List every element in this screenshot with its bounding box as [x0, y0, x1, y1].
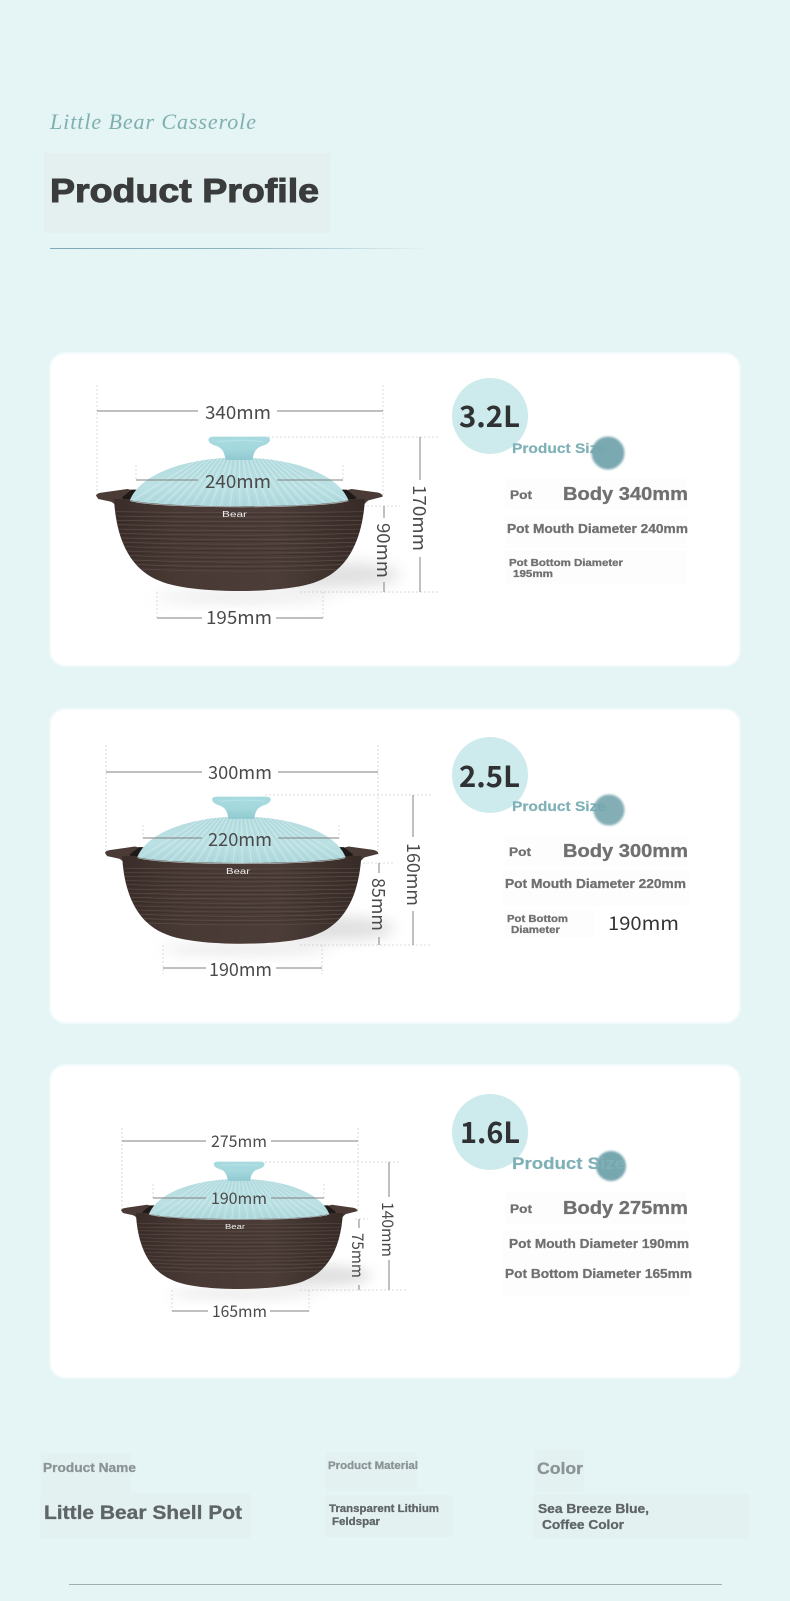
size specs 2.5L: Pot: [509, 845, 531, 859]
capacity badge 3.2L: 3.2L: [459, 394, 520, 436]
size specs 2.5L: Pot Bottom: [507, 914, 568, 925]
panel: 1.6L size card: [50, 1065, 740, 1378]
product material block: Feldspar: [332, 1516, 381, 1528]
product material block: Product Material: [328, 1460, 418, 1472]
product name block: [40, 1453, 250, 1539]
diagram: 3.2L pot dimensions: 240mm: [205, 468, 271, 494]
panel: 2.5L size card: [50, 709, 740, 1023]
color block: [534, 1450, 749, 1539]
size specs 1.6L: Body 275mm: [563, 1198, 688, 1218]
diagram: 3.2L pot dimensions: 195mm: [206, 604, 272, 630]
diagram: 3.2L pot dimensions: 170mm: [407, 485, 433, 551]
color block: Sea Breeze Blue,: [538, 1501, 649, 1516]
diagram: 2.5L pot dimensions: Bear: [226, 867, 250, 876]
size specs 2.5L: Body 300mm: [563, 841, 688, 861]
diagram: 1.6L pot dimensions: 75mm: [347, 1233, 371, 1278]
color block: Color: [537, 1459, 583, 1478]
diagram: 3.2L pot dimensions: [96, 385, 440, 630]
color block: Coffee Color: [542, 1517, 624, 1532]
diagram: 2.5L pot dimensions: [105, 745, 432, 982]
size specs 3.2L: Pot Mouth Diameter 240mm: [507, 521, 688, 536]
product material block: Transparent Lithium: [329, 1503, 439, 1515]
diagram: 2.5L pot dimensions: 190mm: [209, 956, 272, 982]
size specs 1.6L: [503, 1192, 692, 1296]
diagram: 1.6L pot dimensions: 190mm: [211, 1185, 267, 1209]
size specs 3.2L: Pot: [510, 488, 532, 502]
size specs 2.5L: Pot Mouth Diameter 220mm: [505, 876, 686, 891]
panel: 3.2L size card: [50, 353, 740, 666]
capacity badge 2.5L: [452, 737, 528, 813]
size specs 1.6L: Pot Mouth Diameter 190mm: [509, 1236, 689, 1251]
diagram: 1.6L pot dimensions: 275mm: [211, 1128, 267, 1152]
diagram: 1.6L pot dimensions: [121, 1128, 408, 1322]
size specs 3.2L: 195mm: [513, 569, 553, 580]
size specs 3.2L: [505, 478, 688, 584]
product name block: Product Name: [43, 1460, 136, 1475]
capacity badge 1.6L: 1.6L: [460, 1110, 520, 1152]
diagram: 1.6L pot dimensions: 165mm: [212, 1298, 267, 1322]
brand script heading: Little Bear Casserole: [49, 109, 256, 134]
size specs 2.5L: 190mm: [608, 909, 679, 936]
product size heading: [512, 794, 624, 826]
diagram: 2.5L pot dimensions: 160mm: [401, 843, 427, 906]
product size heading: [512, 436, 624, 470]
capacity badge 2.5L: 2.5L: [459, 754, 520, 796]
size specs 2.5L: Diameter: [511, 925, 560, 936]
size specs 1.6L: Pot: [510, 1202, 532, 1216]
diagram: 2.5L pot dimensions: 220mm: [208, 826, 272, 852]
product size heading: Product Size: [512, 798, 606, 814]
title panel: Product Profile: [50, 172, 319, 209]
title panel: [44, 153, 330, 233]
capacity badge 3.2L: [452, 378, 528, 454]
product size heading: [512, 1151, 626, 1181]
product name block: Little Bear Shell Pot: [44, 1503, 243, 1524]
diagram: 1.6L pot dimensions: Bear: [225, 1224, 246, 1231]
diagram: 1.6L pot dimensions: 140mm: [377, 1202, 401, 1257]
diagram: 3.2L pot dimensions: 90mm: [371, 523, 397, 578]
size specs 3.2L: Body 340mm: [563, 484, 688, 504]
size specs 1.6L: Pot Bottom Diameter 165mm: [505, 1266, 692, 1281]
product size heading: Product Size: [512, 440, 606, 456]
size specs 3.2L: Pot Bottom Diameter: [509, 558, 623, 569]
diagram: 3.2L pot dimensions: 340mm: [205, 399, 271, 425]
diagram: 3.2L pot dimensions: Bear: [222, 510, 247, 519]
product material block: [326, 1452, 453, 1537]
size specs 2.5L: [503, 835, 689, 938]
diagram: 2.5L pot dimensions: 300mm: [208, 759, 272, 785]
product size heading: Product Size: [512, 1155, 625, 1173]
diagram: 2.5L pot dimensions: 85mm: [366, 878, 392, 931]
capacity badge 1.6L: [452, 1094, 528, 1170]
